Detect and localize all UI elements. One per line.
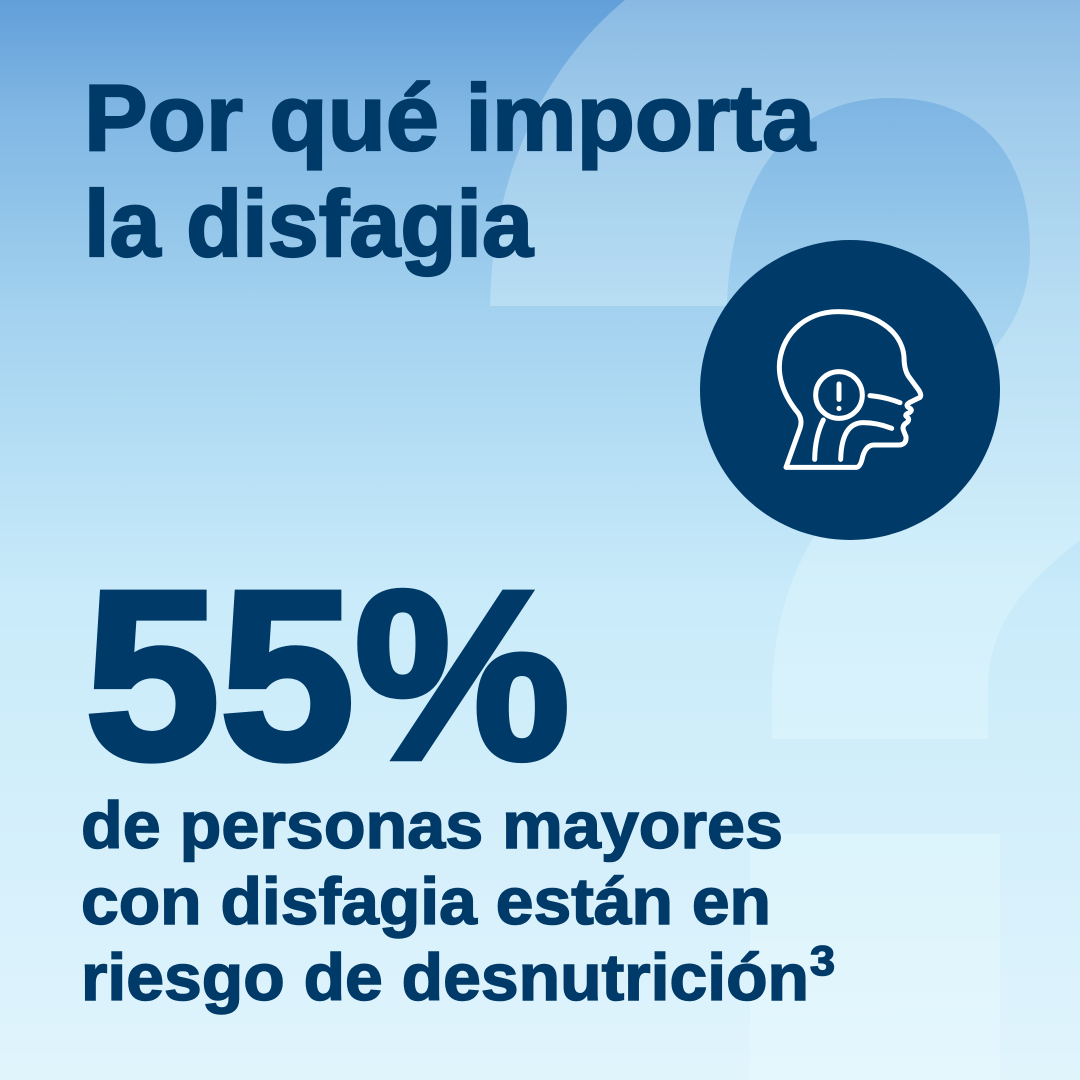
icon line art	[779, 312, 921, 467]
background question mark	[490, 0, 1080, 1080]
icon: head with swallowing alert	[700, 240, 1000, 540]
title	[84, 65, 816, 276]
title: la disfagia	[84, 171, 534, 276]
statistic description: riesgo de desnutrición	[81, 940, 809, 1014]
statistic description: con disfagia están en	[81, 864, 771, 938]
big statistic: 55%	[85, 541, 570, 809]
statistic description	[81, 788, 835, 1014]
icon background circle	[700, 240, 1000, 540]
statistic description: de personas mayores	[81, 788, 783, 862]
title: Por qué importa	[84, 65, 816, 170]
statistic description: 3	[810, 937, 835, 984]
